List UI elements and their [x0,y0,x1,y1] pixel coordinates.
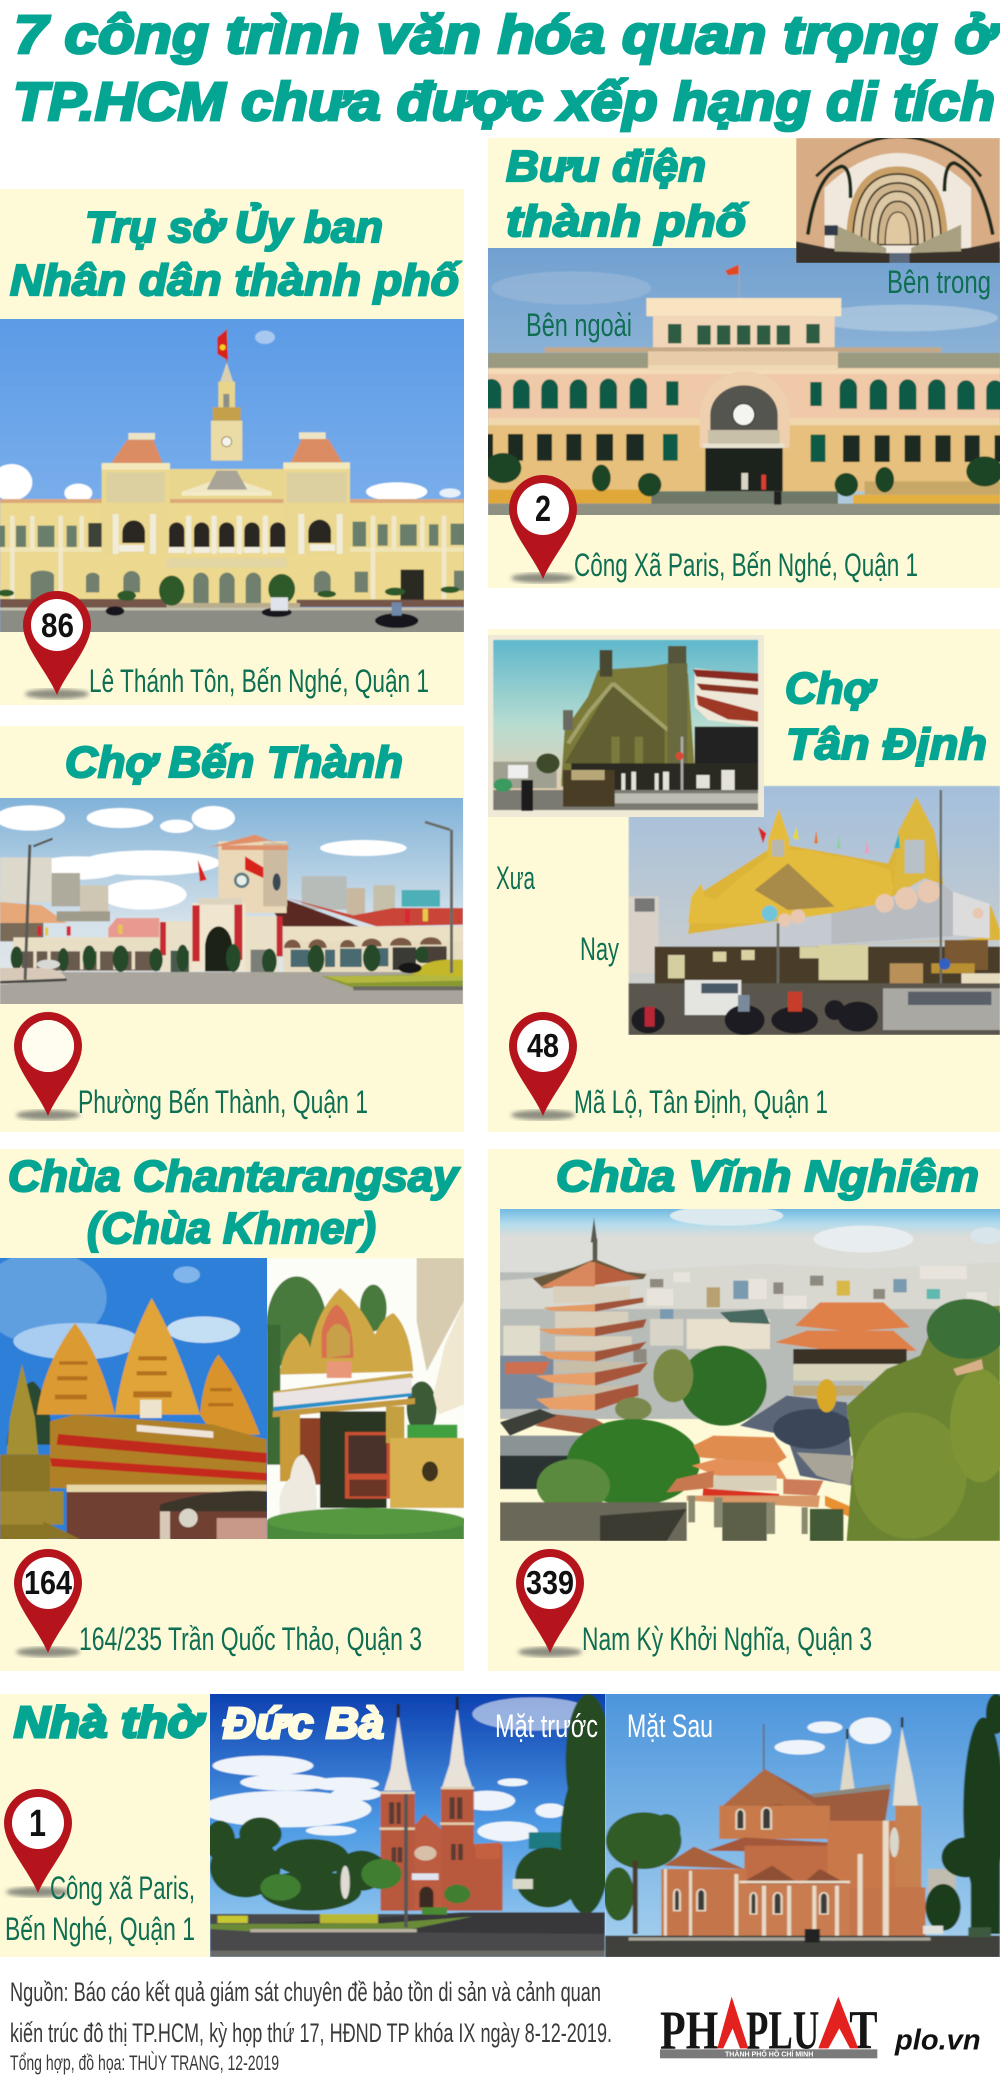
heading: Bưu điện [506,142,748,246]
label: Mặt Sau: Mặt Sau [627,1708,713,1744]
address: Lê Thánh Tôn, Bến Nghé, Quận 1 [89,663,429,699]
photo: post office exterior [488,248,1000,515]
address: Công xã Paris, [50,1870,195,1906]
address: Mã Lộ, Tân Định, Quận 1 [574,1084,828,1120]
heading: Bưu điện: Bưu điện [506,142,706,191]
pin: 1: 1 [29,1803,46,1845]
address [5,1870,195,1947]
source text [10,1977,612,2075]
heading: Chợ Tân Định: Tân Định [786,720,987,769]
panel: Chợ Bến Thành [0,726,471,1132]
panel: Trụ sở Ủy ban Nhân dân thành phố [0,189,471,705]
panel: Chợ Tân Định [488,629,1000,1132]
title: 7 công trình văn hóa quan trọng ở [14,5,1000,65]
logo: Pháp Luật: PH [660,1999,718,2060]
pin: 339: 339 [526,1564,574,1601]
photo: Ben Thanh market [0,798,463,1004]
source text: kiến trúc đô thị TP.HCM, kỳ họp thứ 17, HĐND TP khóa IX ngày 8-12-2019. [10,2018,612,2048]
photo: Khmer temple gate [267,1258,464,1539]
label: Nay: Nay [580,931,619,967]
source text: Nguồn: Báo cáo kết quả giám sát chuyên đề bảo tồn di sản và cảnh quan [10,1977,601,2007]
logo: Pháp Luật: PLU [746,1999,819,2060]
pin: 86 [23,591,91,699]
label: Bên ngoài: Bên ngoài [526,307,632,343]
source text: Tổng hợp, đồ họa: THÙY TRANG, 12-2019 [10,2052,279,2075]
photo: Khmer temple roofs [0,1258,267,1539]
pin: 164: 164 [24,1564,73,1601]
heading: Chợ Tân Định [785,664,987,769]
pin: 1 [4,1789,72,1897]
address: Nam Kỳ Khởi Nghĩa, Quận 3 [582,1621,872,1657]
panel: Chùa Chantarangsay [0,1149,467,1671]
logo: Pháp Luật: T [849,1999,878,2060]
photo: city hall [0,319,464,632]
pin: 48: 48 [527,1027,559,1064]
heading [8,1152,461,1253]
address: Phường Bến Thành, Quận 1 [78,1084,368,1120]
panel: Nhà thờ Đức Bà [0,1691,1000,1960]
panel: Chùa Vĩnh Nghiêm [488,1149,1000,1671]
heading: Trụ sở Ủy ban [10,201,461,305]
photo: cathedral rear [605,1694,1000,1957]
heading: Trụ sở Ủy ban: Nhân dân thành phố [10,256,461,305]
pin: 164 [14,1549,82,1657]
logo: Pháp Luật: THÀNH PHỐ HỒ CHÍ MINH [725,2049,813,2059]
title [13,5,1000,132]
pin: 2 [509,475,577,583]
logo: Pháp Luật: plo.vn [894,2024,981,2056]
heading: Chợ Tân Định: Chợ [785,664,877,713]
heading: Đức Bà: Đức Bà [223,1699,384,1748]
photo: post office interior [796,138,1000,263]
logo: Pháp Luật [660,1997,981,2060]
label: Mặt trước: Mặt trước [495,1708,598,1744]
heading: Chợ Bến Thành [65,738,403,787]
heading: (Chùa Khmer) [87,1204,376,1253]
heading: Chùa Vĩnh Nghiêm [556,1152,979,1201]
photo: Tan Dinh market now [628,786,1000,1035]
photo: cathedral front [210,1694,605,1957]
panel: Bưu điện thành phố [481,136,1000,588]
address: 164/235 Trần Quốc Thảo, Quận 3 [79,1621,422,1657]
photo: Tan Dinh market old [488,635,764,817]
pin: 48 [509,1012,577,1120]
address: Bến Nghé, Quận 1 [5,1911,195,1947]
heading: Bưu điện: thành phố [506,197,748,246]
pin: 2: 2 [535,488,551,529]
pin: Ben Thanh [14,1012,82,1120]
photo: Vinh Nghiem pagoda [500,1209,1000,1541]
pin: 86: 86 [41,607,74,645]
heading: Trụ sở Ủy ban: Trụ sở Ủy ban [85,201,383,252]
heading: Nhà thờ: Nhà thờ [14,1698,206,1747]
label: Xưa: Xưa [496,860,535,896]
pin: 339 [516,1549,584,1657]
title: TP.HCM chưa được xếp hạng di tích [13,72,995,132]
heading: Chùa Chantarangsay [8,1152,461,1201]
